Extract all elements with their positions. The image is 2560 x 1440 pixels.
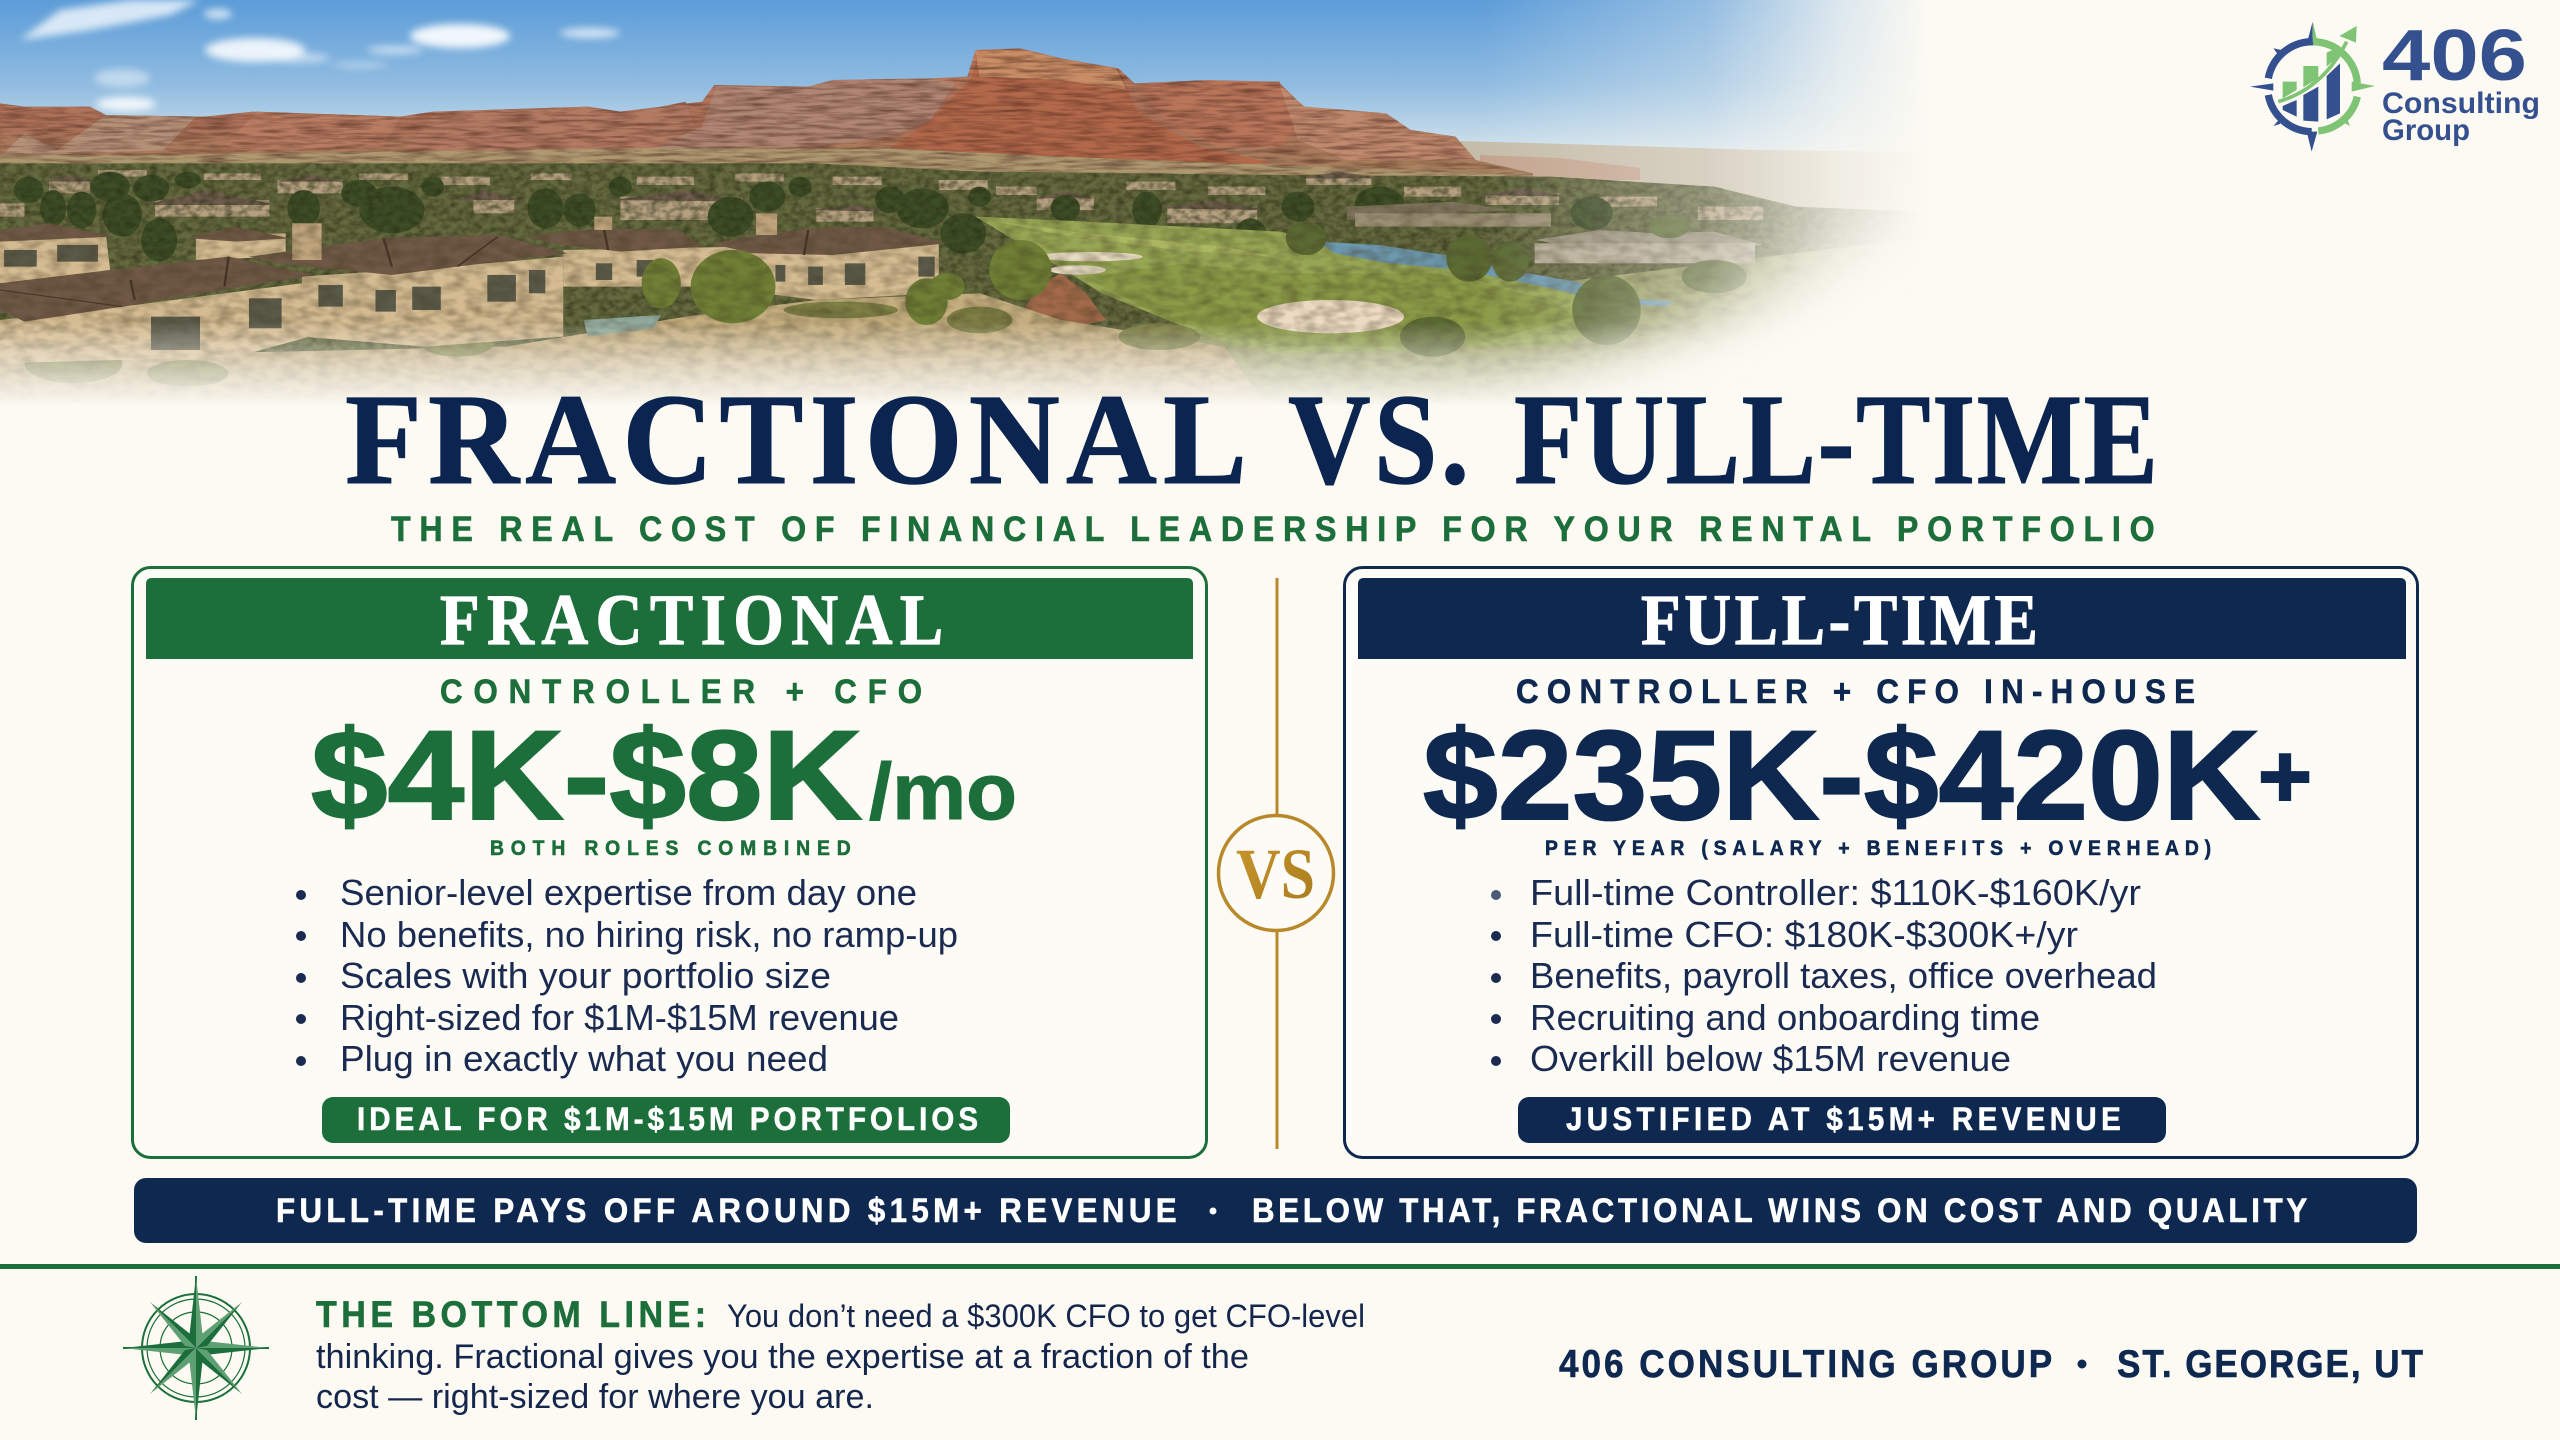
title: FRACTIONAL (345, 367, 1247, 511)
the bottom line statement (316, 1294, 1365, 1416)
cost list: Recruiting and onboarding time (1530, 997, 2040, 1038)
golf course and villas (0, 202, 1842, 402)
justified-at pill (1518, 1097, 2166, 1143)
shrubs on the slope (24, 302, 1200, 387)
price note: PER YEAR (SALARY + BENEFITS + OVERHEAD) (1545, 837, 2211, 860)
ideal-for pill: IDEAL FOR $1M-$15M PORTFOLIOS (357, 1101, 978, 1137)
logo compass mark (2250, 22, 2375, 152)
role label: CONTROLLER + CFO IN-HOUSE (1516, 672, 2195, 710)
foreground trees (642, 240, 1051, 325)
panel header: FRACTIONAL (440, 580, 943, 660)
summary banner (134, 1178, 2417, 1243)
panel header (146, 578, 1193, 660)
company and location: 406 CONSULTING GROUP (1559, 1341, 2052, 1385)
price: $4K-$8K (311, 704, 862, 846)
golf sand bunkers (1257, 300, 1404, 333)
cost list (1491, 872, 2157, 1079)
cost list: Overkill below $15M revenue (1530, 1038, 2011, 1079)
icon: compass rose (123, 1276, 269, 1420)
summary banner: BELOW THAT, FRACTIONAL WINS ON COST AND QUALITY (1252, 1191, 2307, 1229)
cost list: Full-time Controller: $110K-$160K/yr (1530, 872, 2141, 913)
golf course fairway (975, 217, 1600, 353)
gold divider line (1276, 578, 1278, 1149)
logo: 406 Consulting Group: Group (2382, 114, 2470, 147)
town band (0, 163, 1889, 352)
price: /mo (869, 747, 1017, 836)
company and location: ST. GEORGE, UT (2117, 1341, 2423, 1385)
lower right meadow (1196, 249, 1842, 402)
the bottom line statement: cost — right-sized for where you are. (316, 1378, 874, 1416)
footer rule (0, 1264, 2560, 1269)
the bottom line statement: You don’t need a $300K CFO to get CFO-level (727, 1298, 1365, 1334)
divider with VS badge (1218, 578, 1334, 1149)
panel: fractional (132, 568, 1206, 1158)
benefit list: No benefits, no hiring risk, no ramp-up (340, 914, 958, 955)
panel header (1358, 578, 2406, 660)
panel: full-time (1344, 568, 2418, 1158)
justified-at pill: JUSTIFIED AT $15M+ REVENUE (1566, 1101, 2121, 1137)
chimneys (292, 213, 777, 260)
pool (584, 315, 661, 337)
hero landscape photo: desert mesas, villas and golf course (0, 0, 1907, 402)
title (345, 367, 2158, 512)
the bottom line statement: THE BOTTOM LINE: (316, 1294, 706, 1335)
ground under villas (0, 293, 1280, 423)
price note: BOTH ROLES COMBINED (490, 837, 851, 860)
benefit list: Plug in exactly what you need (340, 1038, 828, 1079)
panel border (132, 568, 1206, 1158)
the bottom line statement: thinking. Fractional gives you the expertise at a fraction of the (316, 1338, 1249, 1376)
cypress trees (14, 172, 1613, 262)
benefit list (296, 872, 958, 1079)
rock outcrop (1025, 273, 1106, 324)
company and location (1559, 1341, 2423, 1385)
lake (1318, 242, 1673, 307)
title: VS. (1288, 368, 1469, 512)
VS badge (1218, 816, 1334, 930)
logo wordmark: 406 (2382, 16, 2527, 96)
role label: CONTROLLER + CFO (440, 672, 922, 710)
clouds (20, 0, 620, 111)
villa walls (0, 233, 939, 363)
villa windows (4, 245, 935, 350)
distant ridge (1460, 141, 1878, 210)
price: $235K-$420K (1423, 704, 2260, 846)
VS badge: VS (1236, 834, 1315, 914)
benefit list: Senior-level expertise from day one (340, 872, 917, 913)
price: + (2258, 727, 2312, 827)
distant houses (0, 170, 1763, 223)
subtitle: THE REAL COST OF FINANCIAL LEADERSHIP FOR YOUR RENTAL PORTFOLIO (391, 511, 2155, 549)
title: FULL-TIME (1514, 368, 2158, 512)
logo: 406 Consulting Group (2250, 16, 2540, 152)
cost list: Full-time CFO: $180K-$300K+/yr (1530, 914, 2078, 955)
villa tile roofs (0, 223, 947, 322)
benefit list: Right-sized for $1M-$15M revenue (340, 997, 899, 1038)
panel border (1344, 568, 2418, 1158)
logo: 406 Consulting Group: Consulting (2382, 87, 2540, 120)
mesas (0, 48, 1533, 187)
right villas (1347, 202, 1763, 263)
benefit list: Scales with your portfolio size (340, 955, 831, 996)
sky (0, 0, 1907, 151)
cost list: Benefits, payroll taxes, office overhead (1530, 955, 2157, 996)
panel header: FULL-TIME (1641, 580, 2038, 660)
summary banner: FULL-TIME PAYS OFF AROUND $15M+ REVENUE (276, 1191, 1177, 1229)
